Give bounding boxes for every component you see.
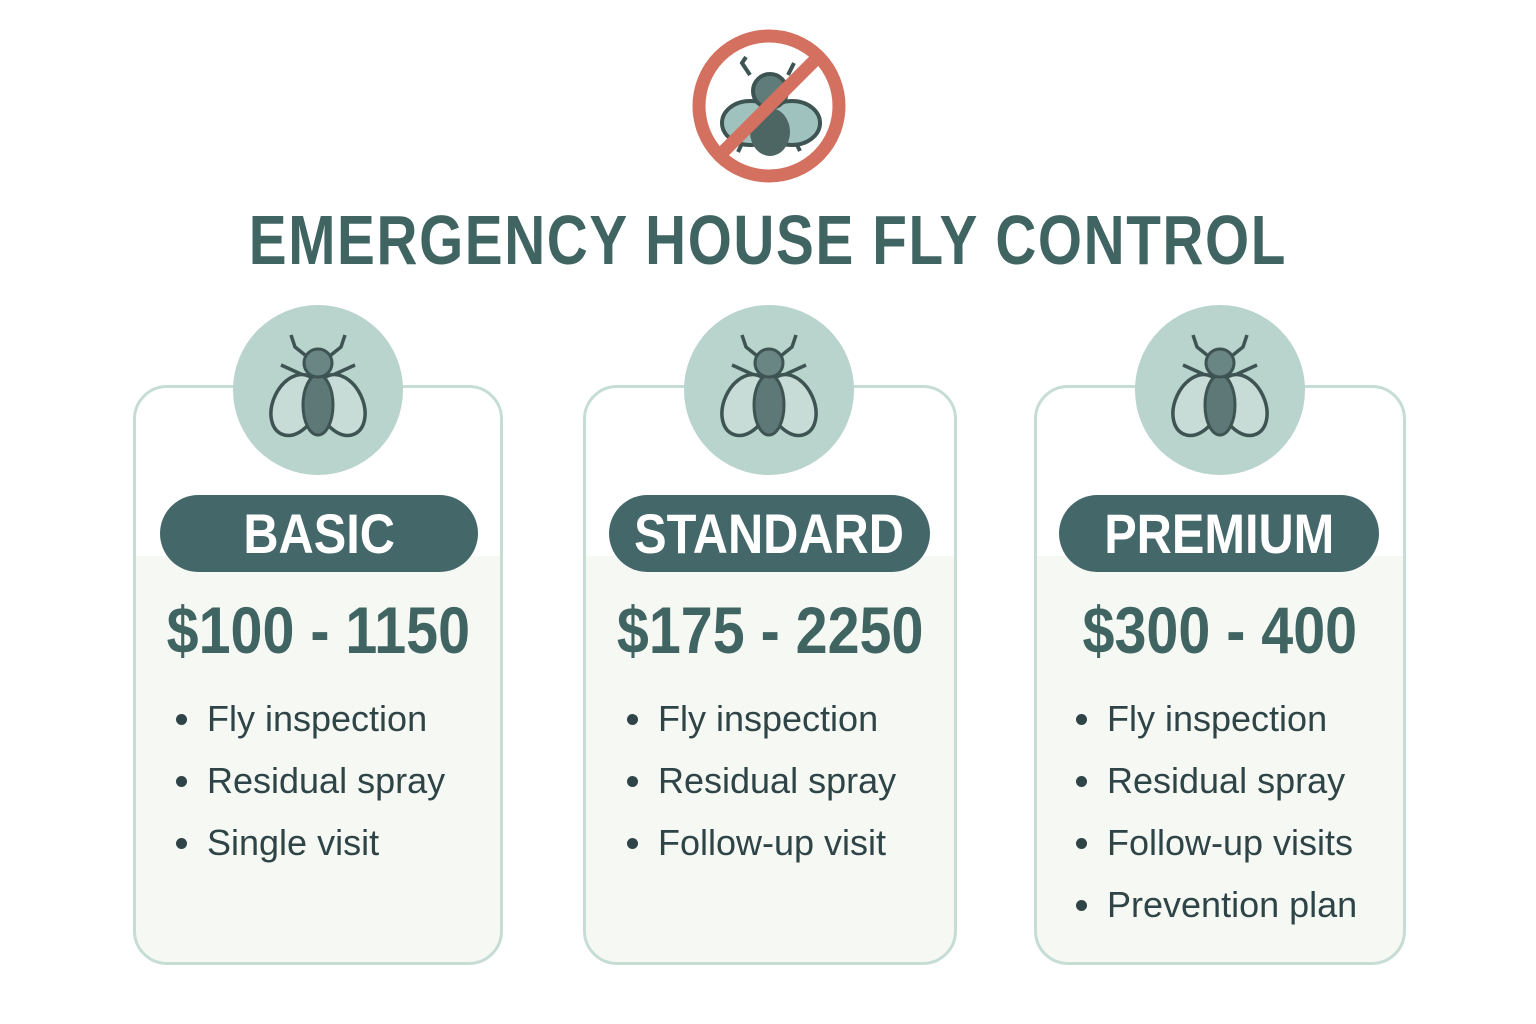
pill: BASIC: [160, 495, 478, 572]
title: EMERGENCY HOUSE FLY CONTROL: [249, 201, 1287, 279]
pill: PREMIUM: [1059, 495, 1379, 572]
price premium: $300 - 400: [1083, 593, 1357, 667]
icon: no flies: [692, 30, 846, 182]
icon: fly standard: [684, 305, 854, 475]
list standard: [627, 698, 896, 863]
price basic: $100 - 1150: [166, 593, 470, 667]
icon: fly basic: [233, 305, 403, 475]
pill: STANDARD: STANDARD: [635, 502, 904, 565]
icon: fly premium: [1135, 305, 1305, 475]
list basic: [176, 698, 445, 863]
card frame premium: [1034, 385, 1406, 965]
list standard: Fly inspection: [658, 698, 878, 739]
pill: STANDARD: [609, 495, 930, 572]
panel: basic: [133, 305, 503, 965]
card frame basic: [133, 385, 503, 965]
panel: standard: [583, 305, 957, 965]
list premium: Fly inspection: [1107, 698, 1327, 739]
pill: BASIC: BASIC: [243, 502, 395, 565]
list basic: Single visit: [207, 822, 379, 863]
list premium: Follow-up visits: [1107, 822, 1353, 863]
list premium: [1076, 698, 1357, 925]
pill: PREMIUM: PREMIUM: [1104, 502, 1334, 565]
card frame standard: [583, 385, 957, 965]
list basic: Residual spray: [207, 760, 445, 801]
panel: premium: [1034, 305, 1406, 965]
list standard: Follow-up visit: [658, 822, 886, 863]
price standard: $175 - 2250: [617, 593, 923, 667]
list standard: Residual spray: [658, 760, 896, 801]
list premium: Residual spray: [1107, 760, 1345, 801]
list basic: Fly inspection: [207, 698, 427, 739]
list premium: Prevention plan: [1107, 884, 1357, 925]
